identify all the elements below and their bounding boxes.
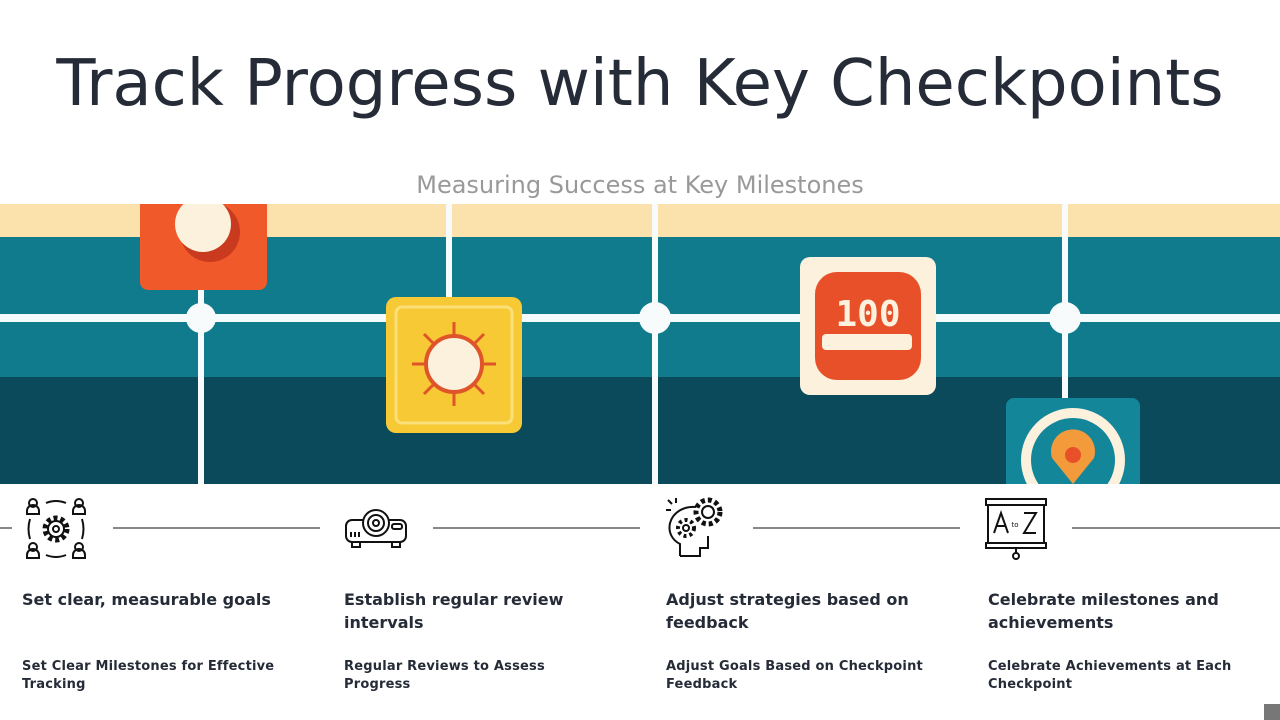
banner illustration (0, 204, 1280, 484)
step 4: Celebrate milestones and achievements (988, 590, 1219, 632)
step 1: Set clear, measurable goals (22, 590, 271, 609)
timeline connectors (0, 527, 12, 529)
title: Track Progress with Key Checkpoints (56, 47, 1224, 121)
icon: head with gears (666, 498, 722, 557)
step 2: Regular Reviews to Assess Progress (344, 659, 545, 692)
icon tile: sun (386, 297, 522, 433)
icon: team gear (26, 498, 86, 559)
icon tile: 100: 100 (835, 294, 901, 335)
corner marker (1264, 704, 1280, 720)
subtitle: Measuring Success at Key Milestones (416, 171, 864, 199)
icon tile: orange (140, 196, 267, 290)
step 3: Adjust strategies based on feedback (666, 590, 909, 632)
step 1 (22, 590, 274, 692)
icon: A to Z board (985, 498, 1047, 560)
icon tile: location pin (1006, 398, 1140, 512)
step 1: Set Clear Milestones for Effective Tracking (22, 659, 274, 692)
step 2: Establish regular review intervals (344, 590, 563, 632)
step 4 (988, 590, 1232, 692)
step 3: Adjust Goals Based on Checkpoint Feedback (666, 659, 923, 692)
step 3 (666, 590, 923, 692)
icon: A to Z board: to (1011, 521, 1019, 529)
step 4: Celebrate Achievements at Each Checkpoint (988, 659, 1232, 692)
icon: projector (345, 509, 407, 548)
step 2 (344, 590, 563, 692)
icon tile: 100 (800, 257, 936, 395)
